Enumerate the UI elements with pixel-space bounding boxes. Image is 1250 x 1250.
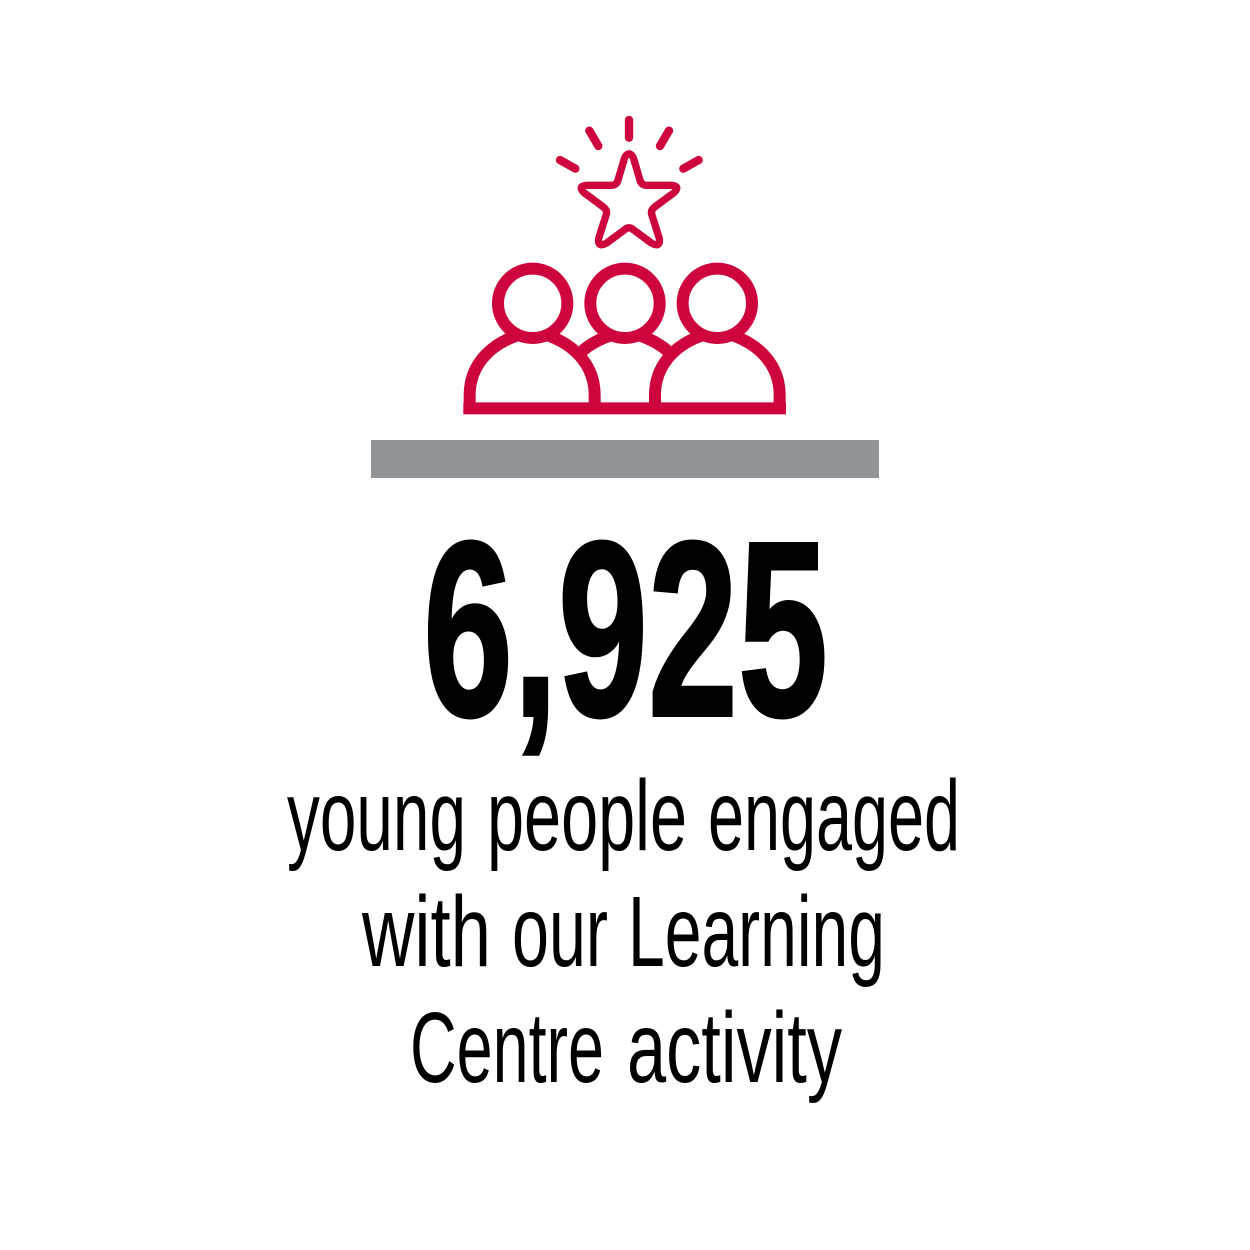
description line 1: people — [487, 760, 687, 872]
description line 3: activity — [627, 992, 842, 1104]
description line 1: engaged — [708, 760, 960, 872]
description line 2 — [361, 876, 885, 988]
description line 3 — [410, 992, 842, 1104]
description line 2: Learning — [628, 876, 885, 988]
description text — [287, 760, 960, 1104]
icon: star — [581, 154, 677, 245]
icon: star with rays above three people — [463, 120, 786, 408]
description line 2: with — [361, 876, 491, 988]
description line 3: Centre — [410, 992, 604, 1104]
icon: rays — [560, 120, 699, 169]
description line 1 — [287, 760, 960, 872]
description line 1: young — [287, 760, 466, 872]
grey divider bar — [371, 440, 879, 478]
description line 2: our — [512, 876, 608, 988]
icon: three people — [463, 269, 786, 408]
headline number: 6,925 — [423, 490, 828, 768]
